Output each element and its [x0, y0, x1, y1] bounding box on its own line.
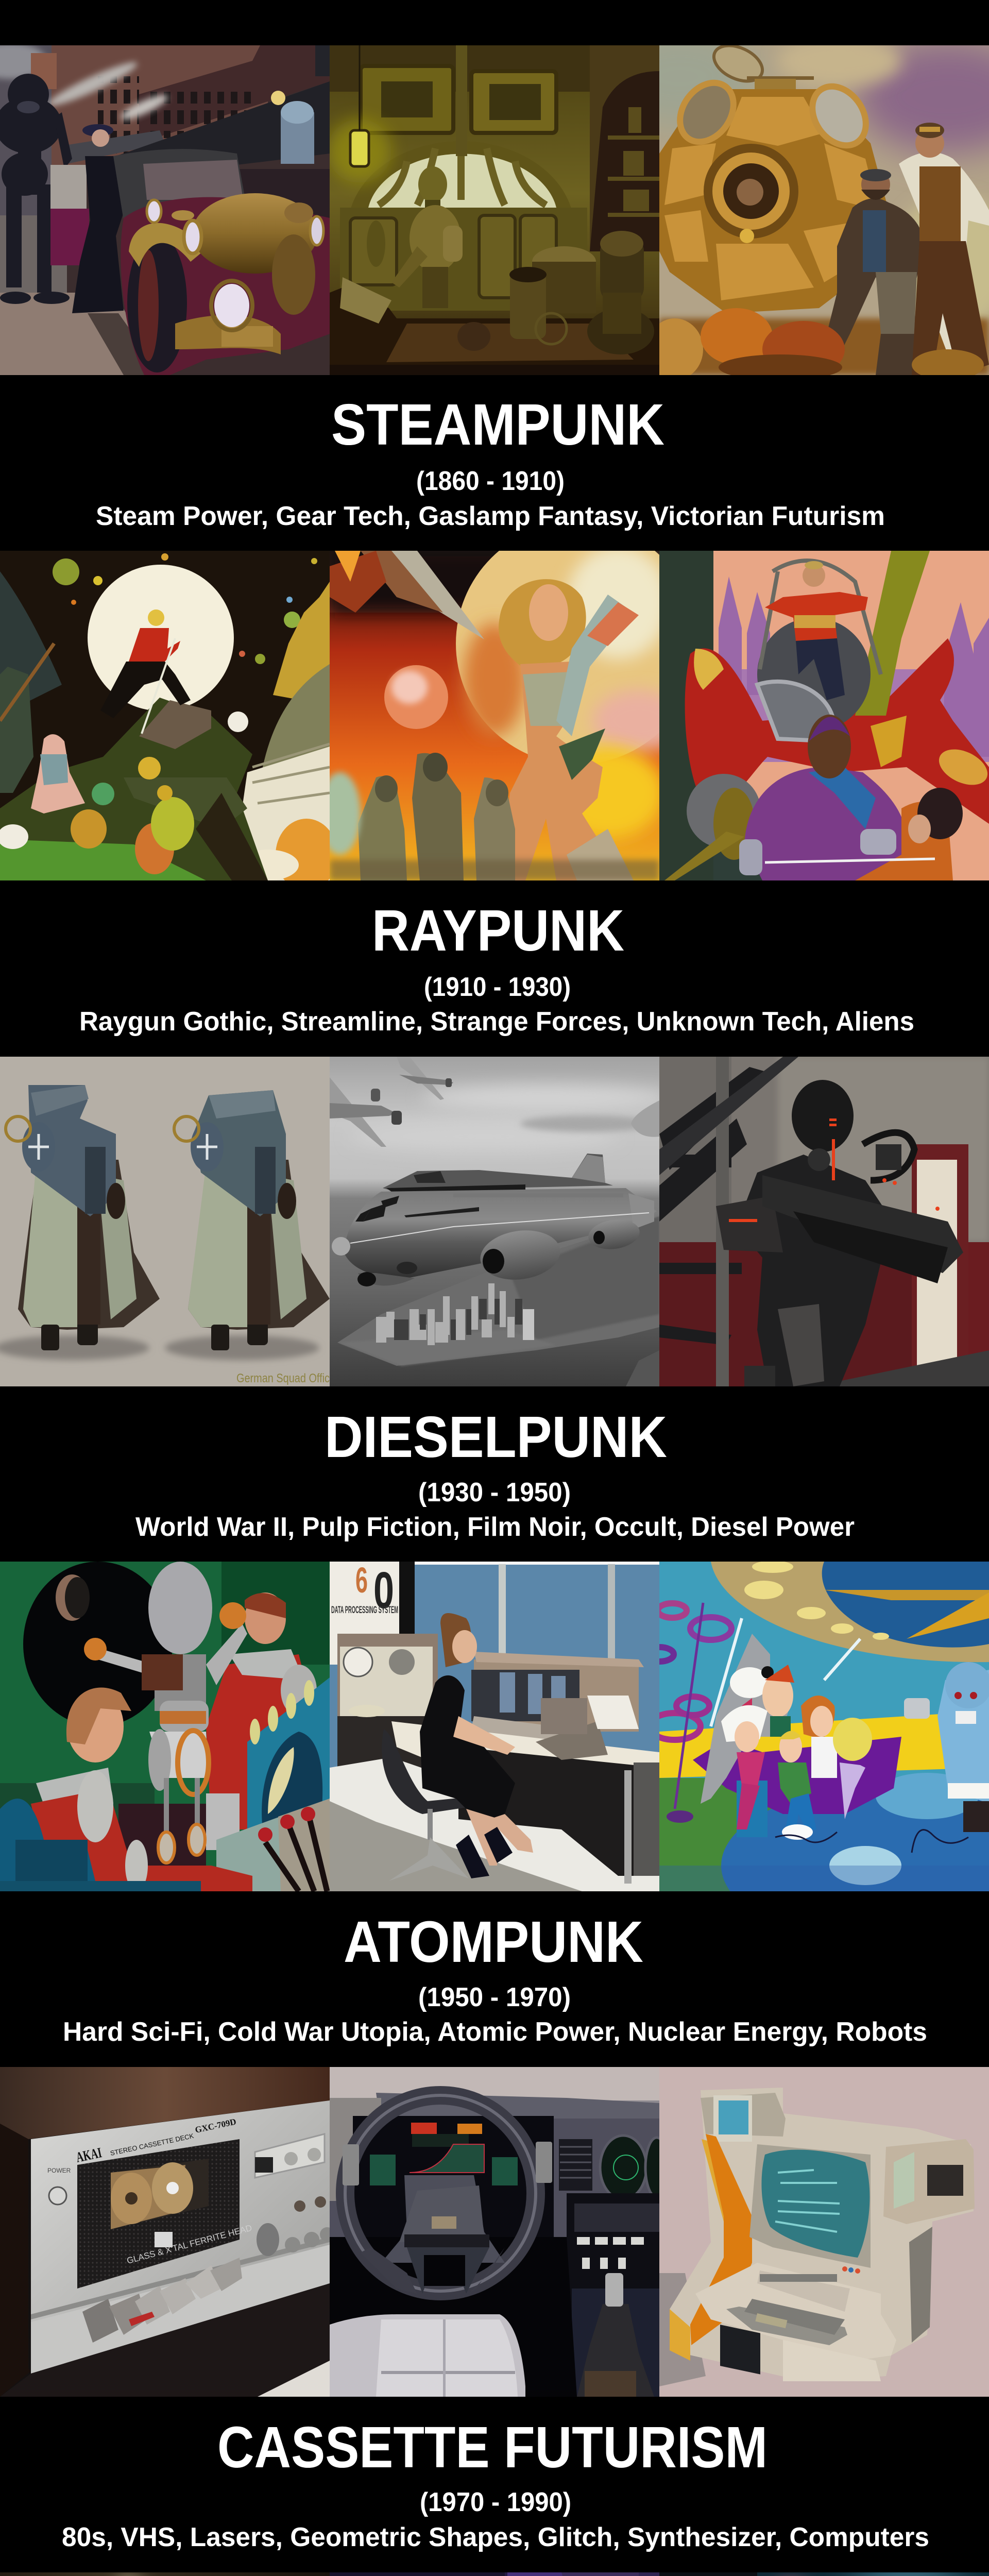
stairs: [659, 1067, 768, 1345]
blue machine: [0, 1799, 201, 1891]
image: augmented man smoking on a sofa: [0, 2572, 330, 2576]
open car door and seat: [50, 165, 87, 209]
image: neon purple street with pedestrians: [330, 2572, 659, 2576]
gauge cluster: [353, 2116, 554, 2240]
image: two coated soldiers concept art: [0, 1057, 330, 1386]
sofa cushion: [833, 1718, 872, 1761]
labels: [75, 2116, 237, 2166]
rocks & hill: [0, 698, 268, 880]
image: AKAI cassette deck: POWER: [47, 2167, 71, 2174]
themes: 80s, VHS, Lasers, Geometric Shapes, Glitch, Synthesizer, Computers: [62, 2522, 929, 2552]
LEDs: [842, 2266, 860, 2274]
shelves: [590, 45, 659, 251]
section: cassette futurism: [0, 2067, 989, 2552]
section: raypunk: [0, 551, 989, 1037]
disk drive: [720, 2325, 760, 2375]
text: steampunk caption: [96, 392, 885, 531]
soldier 1: [6, 1085, 160, 1350]
robot maid: [904, 1662, 989, 1832]
labels: GXC-709D: [194, 2116, 237, 2135]
image: comic hero on alien planet: [0, 551, 330, 880]
sign: [331, 1560, 398, 1619]
red craft: [685, 638, 989, 824]
dates: (1970 - 1990): [420, 2487, 571, 2517]
tape unit: [337, 1634, 438, 1768]
lamp: [328, 119, 391, 183]
car: [113, 149, 330, 375]
man with rifle: [0, 667, 33, 793]
section: cyberpunk: [0, 2572, 989, 2576]
small monitor: [883, 2139, 975, 2224]
dates: (1860 - 1910): [416, 466, 565, 496]
woman: [499, 579, 639, 880]
themes: Raygun Gothic, Streamline, Strange Forces, Unknown Tech, Aliens: [79, 1007, 914, 1037]
section: steampunk: [0, 45, 989, 531]
saucer ceiling: [711, 1561, 989, 1662]
villain: [739, 715, 908, 880]
steering wheel: [345, 2095, 536, 2294]
image: AKAI cassette deck: [0, 2067, 330, 2397]
cassette window: [77, 2139, 253, 2289]
small boats on harbour: [626, 1350, 659, 1386]
themes: World War II, Pulp Fiction, Film Noir, Occult, Diesel Power: [135, 1512, 855, 1542]
blue panel: [247, 1677, 330, 1850]
image: armoured trooper with rifle by stairs: [659, 1057, 989, 1386]
dates: (1950 - 1970): [418, 1982, 571, 2012]
front astronaut: [31, 1687, 252, 1891]
image: streamlined aircraft above a black and white city: [330, 1057, 659, 1386]
mushrooms: [0, 757, 194, 874]
text: raypunk caption: [79, 898, 914, 1037]
airship: [332, 1154, 657, 1286]
control panel: [216, 1799, 330, 1891]
main monitor: [749, 2144, 871, 2268]
father: [737, 1665, 794, 1837]
side vent: [909, 2227, 932, 2343]
sofa: [693, 1737, 901, 1814]
image: astronauts and robot in a spaceship: [0, 1562, 330, 1891]
floor: [0, 2283, 330, 2397]
daughter: [721, 1705, 768, 1829]
dates: (1930 - 1950): [418, 1478, 571, 1507]
back astronaut: [206, 1592, 317, 1850]
explorer in dark coat: [819, 169, 925, 375]
right towers: [273, 582, 330, 705]
wood top: [0, 2067, 330, 2139]
side vents and dials: [559, 2136, 668, 2199]
desk: [391, 1652, 659, 1884]
image: trench-coated man in rainy neon city: [659, 2572, 989, 2576]
silver faceplate: [31, 2100, 330, 2374]
title: RAYPUNK: [372, 898, 624, 963]
themes: Hard Sci-Fi, Cold War Utopia, Atomic Power, Nuclear Energy, Robots: [63, 2017, 927, 2047]
dog: [701, 1634, 793, 1804]
plants: [645, 1603, 731, 1809]
stripes: [670, 2134, 752, 2361]
image: steampunk workshop with brass robot: [330, 45, 659, 375]
son: [778, 1731, 816, 1840]
hero: [765, 561, 868, 700]
image: animated space-age family on a sofa: [659, 1562, 989, 1891]
black footwell: [330, 2237, 577, 2397]
robot: [367, 166, 463, 308]
image: woman operating 1620 computer: [330, 1562, 659, 1891]
dates: (1910 - 1930): [424, 972, 571, 1002]
labels: AKAI: [75, 2145, 103, 2166]
machine body: [670, 2088, 974, 2381]
themes: Steam Power, Gear Tech, Gaslamp Fantasy, Victorian Futurism: [96, 501, 885, 531]
image: 1980s car dashboard with digital gauges: [330, 2067, 659, 2397]
piano keys: [82, 2258, 242, 2343]
soldiers: [358, 753, 515, 880]
pumpkins: [646, 308, 984, 380]
captive: [855, 788, 963, 880]
keyboard base: [695, 2263, 896, 2361]
table: [330, 287, 659, 375]
title: ATOMPUNK: [344, 1909, 643, 1974]
chair: [382, 1729, 479, 1881]
hero: [100, 609, 191, 734]
seat: [330, 2314, 525, 2397]
explorer in waistcoat: [899, 123, 989, 375]
trooper: [716, 1080, 963, 1386]
rocket: [330, 551, 484, 639]
woman: [31, 734, 85, 814]
soldier 2: [174, 1090, 330, 1350]
cassette window: GLASS & X'TAL FERRITE HEAD: [126, 2223, 253, 2266]
title: CASSETTE FUTURISM: [217, 2415, 768, 2480]
woman: [420, 1613, 533, 1878]
cockpit sphere: [757, 561, 881, 741]
image: pulp heroine with ray gun: [330, 551, 659, 880]
labels: STEREO CASSETTE DECK: [110, 2132, 195, 2157]
floor: [330, 1757, 659, 1891]
city: [337, 1216, 659, 1366]
sign: 0: [373, 1562, 394, 1619]
text: cassette futurism caption: [62, 2415, 929, 2552]
pod: [664, 774, 761, 880]
robot: [84, 1562, 247, 1863]
sphere: [659, 73, 889, 313]
image: golden sphere vehicle with two explorers: [659, 45, 989, 375]
image: beige retro computer terminal: [659, 2067, 989, 2397]
section: atompunk: [0, 1562, 989, 2047]
panels: [340, 208, 587, 311]
text: dieselpunk caption: [135, 1404, 855, 1542]
knobs: [255, 2134, 334, 2256]
text: atompunk caption: [63, 1909, 927, 2047]
mother: [801, 1696, 865, 1819]
section: dieselpunk: [0, 1057, 989, 1542]
pods: [343, 2142, 552, 2185]
woman: [72, 124, 128, 313]
robot: [0, 74, 72, 304]
top hatch: [708, 39, 814, 89]
title: STEAMPUNK: [331, 392, 664, 457]
machines: [457, 231, 654, 354]
bomber planes: [330, 1057, 659, 1147]
image: hero and villain on red flying craft: [659, 551, 989, 880]
console: [567, 2193, 659, 2397]
image: woman operating 1620 computer: DATA PROCESSING SYSTEM: [331, 1605, 398, 1616]
image: steampunk street with robot, woman and brass car: [0, 45, 330, 375]
signature scribbles: [775, 1830, 968, 1853]
title: DIESELPUNK: [325, 1404, 667, 1469]
